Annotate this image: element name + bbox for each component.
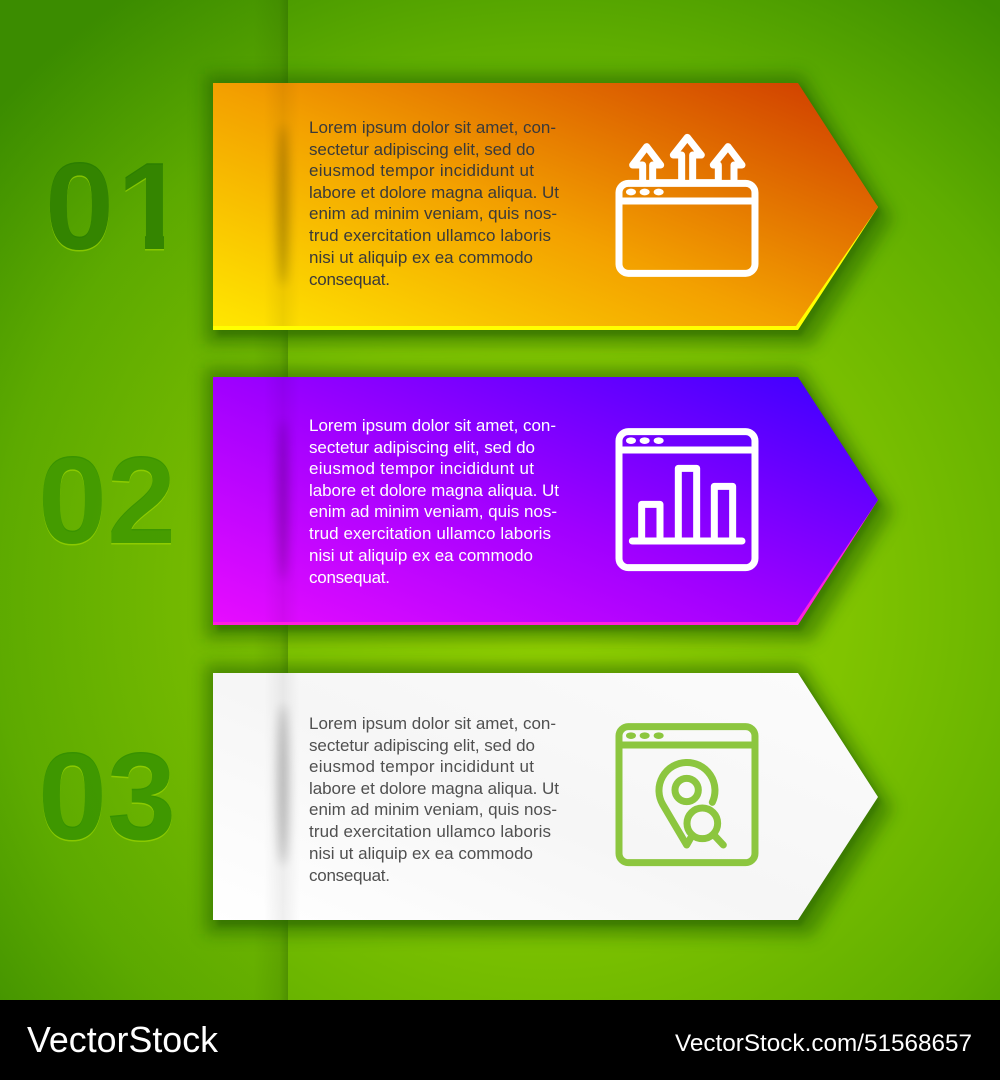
panel 2 fold shading <box>264 377 300 622</box>
panel 2 text: consequat. <box>309 568 390 587</box>
panel 1 soft shadow <box>205 74 893 346</box>
panel 3 arrow body <box>213 673 878 920</box>
footer bar <box>0 1000 1000 1080</box>
panel 1 text: trud exercitation ullamco laboris <box>309 226 551 245</box>
panel 1 text: labore et dolore magna aliqua. Ut <box>309 183 559 202</box>
panel 2 hard shadow <box>217 381 881 631</box>
panel 1 text: sectetur adipiscing elit, sed do <box>309 140 535 159</box>
panel 2 text: Lorem ipsum dolor sit amet, con- <box>309 416 556 435</box>
left background strip <box>0 0 288 1000</box>
panel 2 lip <box>213 395 878 625</box>
panel 3 <box>205 664 893 936</box>
number 03: 03 <box>38 730 176 868</box>
panel 1 hard shadow <box>217 87 881 336</box>
number 02: 02 <box>38 432 176 570</box>
panel 1 text: Lorem ipsum dolor sit amet, con- <box>309 118 556 137</box>
icon: browser window with upward arrows <box>619 137 755 273</box>
icon: browser window with map pin and magnifier <box>619 727 755 863</box>
panel 1 text: eiusmod tempor incididunt ut <box>309 161 534 180</box>
number 02: 02 <box>38 434 176 572</box>
panel 2 text <box>309 416 559 587</box>
panel 3 text: Lorem ipsum dolor sit amet, con- <box>309 714 556 733</box>
panel 2 text: eiusmod tempor incididunt ut <box>309 459 534 478</box>
panel 2 text: labore et dolore magna aliqua. Ut <box>309 481 559 500</box>
panel 3 text: sectetur adipiscing elit, sed do <box>309 736 535 755</box>
number 01: 0 <box>45 138 114 276</box>
panel 1 text: consequat. <box>309 270 390 289</box>
panel 1 <box>205 74 893 346</box>
panel 2 <box>205 368 893 641</box>
panel 2 text: trud exercitation ullamco laboris <box>309 524 551 543</box>
panel 3 text: labore et dolore magna aliqua. Ut <box>309 779 559 798</box>
panel 2 soft shadow <box>205 368 893 641</box>
panel 1 lip <box>213 100 878 330</box>
panel 2 text: sectetur adipiscing elit, sed do <box>309 438 535 457</box>
panel 3 text: consequat. <box>309 866 390 885</box>
number 03: 03 <box>38 728 176 866</box>
number 01: 1 <box>117 140 186 278</box>
panel 1 text: nisi ut aliquip ex ea commodo <box>309 248 533 267</box>
panel 1 arrow body <box>213 83 878 326</box>
number 01 <box>50 162 164 252</box>
panel 3 fold shading <box>264 673 300 920</box>
panel 3 text: nisi ut aliquip ex ea commodo <box>309 844 533 863</box>
panel 1 text: enim ad minim veniam, quis nos- <box>309 204 557 223</box>
panel 3 text: eiusmod tempor incididunt ut <box>309 757 534 776</box>
panel 2 text: nisi ut aliquip ex ea commodo <box>309 546 533 565</box>
panel 2 text: enim ad minim veniam, quis nos- <box>309 502 557 521</box>
panel 2 arrow body <box>213 377 878 622</box>
panel 3 text: trud exercitation ullamco laboris <box>309 822 551 841</box>
footer logo: VectorStock <box>27 1019 219 1060</box>
panel 1 fold shading <box>264 83 300 326</box>
panel 3 text <box>309 714 559 885</box>
panel 1 text <box>309 118 559 289</box>
footer url: VectorStock.com/51568657 <box>675 1030 972 1057</box>
panel 3 hard shadow <box>217 677 881 926</box>
number 01: 0 <box>45 140 114 278</box>
panel 3 soft shadow <box>205 664 893 936</box>
icon: browser window with bar chart <box>619 432 755 568</box>
panel 3 text: enim ad minim veniam, quis nos- <box>309 800 557 819</box>
number 01: 1 <box>117 138 186 276</box>
